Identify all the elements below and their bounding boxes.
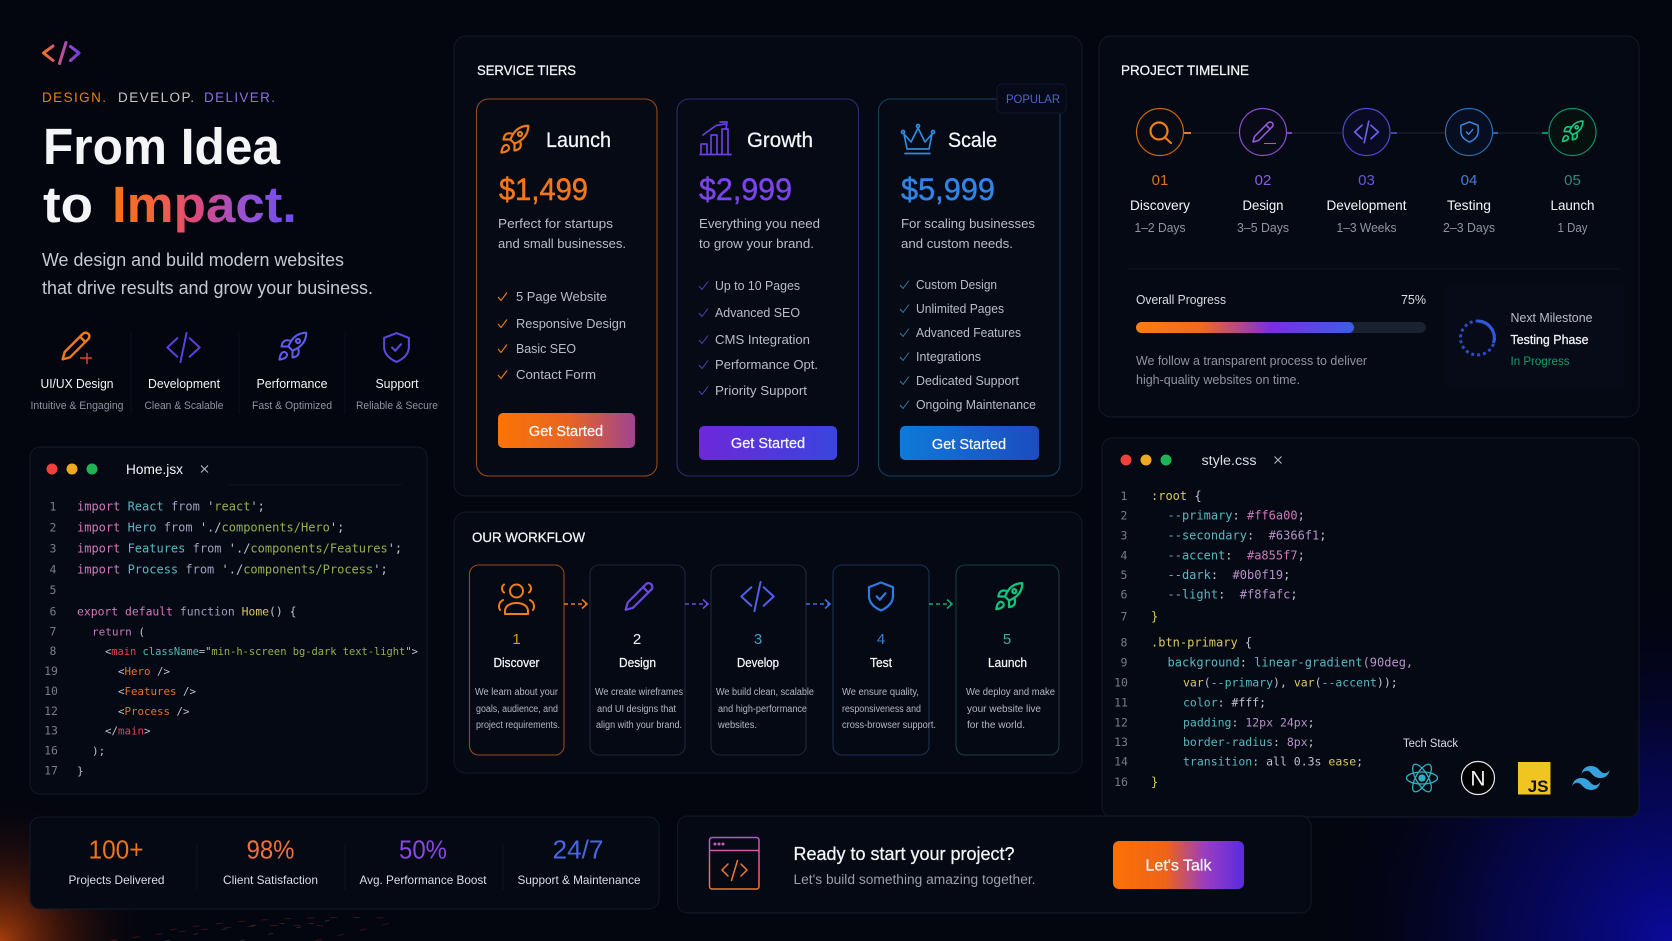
step card: Test: responsiveness and xyxy=(842,704,921,715)
line numbers: 17 xyxy=(44,764,58,778)
line numbers xyxy=(1114,489,1128,789)
step card: Develop xyxy=(711,565,814,755)
step card: Design: 2 xyxy=(633,631,641,648)
title: to xyxy=(43,176,93,233)
step 1: Discovery: Discovery xyxy=(1130,197,1190,213)
line numbers: 10 xyxy=(44,684,58,698)
heading: PROJECT TIMELINE xyxy=(1121,62,1249,78)
code block: ); xyxy=(92,745,105,758)
step card: Discover xyxy=(470,565,564,755)
logo: code brackets xyxy=(44,42,79,64)
step 1: Discovery: 1–2 Days xyxy=(1134,221,1186,235)
code block: import React from 'react'; xyxy=(77,500,265,514)
icon: JavaScript: JS xyxy=(1528,777,1548,796)
overall progress xyxy=(1136,293,1426,387)
description: and small businesses. xyxy=(498,236,626,251)
feature list: Basic SEO xyxy=(516,341,576,356)
code block: --dark: #0b0f19; xyxy=(1168,568,1290,582)
feature: Development xyxy=(144,333,224,412)
line numbers: 16 xyxy=(44,744,58,758)
panel: style.css code editor xyxy=(1102,438,1639,817)
heading: SERVICE TIERS xyxy=(477,62,576,78)
button xyxy=(699,426,837,460)
step 5: Launch: Launch xyxy=(1550,197,1594,213)
title xyxy=(43,118,297,233)
step card: Test: Test xyxy=(870,656,892,670)
line numbers: 10 xyxy=(1114,676,1128,690)
code block xyxy=(1151,489,1413,789)
tier name: Scale xyxy=(948,129,997,152)
line numbers: 8 xyxy=(50,644,57,658)
step 3: Development: 1–3 Weeks xyxy=(1336,221,1396,235)
code block: transition: all 0.3s ease; xyxy=(1183,755,1363,769)
code block: <Hero /> xyxy=(118,665,171,678)
description: and custom needs. xyxy=(901,236,1013,251)
feature list: Responsive Design xyxy=(516,316,626,331)
arrow xyxy=(806,600,830,608)
feature list xyxy=(699,278,818,398)
overall progress: Overall Progress xyxy=(1136,293,1226,307)
line numbers: 7 xyxy=(50,624,57,638)
line numbers: 12 xyxy=(1114,716,1128,730)
icon: rocket xyxy=(501,126,528,153)
step card: Develop: Develop xyxy=(737,656,779,670)
step card: Design: We create wireframes xyxy=(595,687,683,698)
feature list: Custom Design xyxy=(916,278,997,292)
step card: Test: 4 xyxy=(877,631,885,648)
line numbers: 13 xyxy=(44,724,58,738)
icon: JavaScript xyxy=(1518,762,1550,796)
window controls xyxy=(1120,454,1172,466)
stat: projects delivered: 100+ xyxy=(88,834,144,864)
feature list: Performance Opt. xyxy=(715,357,818,372)
line numbers: 6 xyxy=(50,605,57,619)
code block: <main className="min-h-screen bg-dark text-light"> xyxy=(105,646,418,658)
code block: background: linear-gradient(90deg, xyxy=(1168,655,1413,669)
step card: Design xyxy=(590,565,685,755)
step card: Develop: and high-performance xyxy=(718,704,807,715)
heading: Ready to start your project? xyxy=(794,844,1014,864)
step card: Design: align with your brand. xyxy=(596,720,682,731)
feature: Support: Reliable & Secure xyxy=(356,400,438,412)
stat: performance boost: 50% xyxy=(399,834,447,864)
overall progress: high-quality websites on time. xyxy=(1136,373,1300,387)
code block: :root { xyxy=(1151,489,1202,503)
step 4: Testing: 04 xyxy=(1461,172,1477,189)
arrow xyxy=(929,600,952,608)
stat: performance boost: Avg. Performance Boost xyxy=(360,873,487,887)
description: to grow your brand. xyxy=(699,236,814,251)
code block: var(--primary), var(--accent)); xyxy=(1183,676,1398,690)
line numbers: 4 xyxy=(50,562,57,576)
feature list: Contact Form xyxy=(516,367,596,382)
line numbers: 11 xyxy=(1114,696,1128,710)
tier card: Launch xyxy=(476,99,657,476)
arrow xyxy=(685,600,708,608)
button xyxy=(498,413,635,448)
step 4: Testing xyxy=(1443,108,1495,235)
feature: UI/UX Design: UI/UX Design xyxy=(40,376,114,391)
feature list: Advanced SEO xyxy=(715,305,800,320)
next milestone card: Next Milestone xyxy=(1510,311,1593,325)
code block: } xyxy=(1151,610,1158,624)
title: From Idea xyxy=(43,118,281,175)
step card: Discover: Discover xyxy=(494,656,540,670)
code block: --secondary: #6366f1; xyxy=(1168,528,1326,542)
line numbers: 3 xyxy=(50,541,57,555)
feature list: Up to 10 Pages xyxy=(715,278,800,293)
title: Impact. xyxy=(112,176,297,233)
step 3: Development xyxy=(1326,108,1407,235)
line numbers: 16 xyxy=(1114,775,1128,789)
line numbers: 13 xyxy=(1114,735,1128,749)
step card: Develop: We build clean, scalable xyxy=(716,687,814,698)
line numbers: 5 xyxy=(1121,568,1127,582)
line numbers xyxy=(44,500,58,778)
button: Get Started xyxy=(731,436,805,452)
icon: crown xyxy=(902,124,934,154)
overall progress: 75% xyxy=(1401,293,1426,307)
tagline xyxy=(42,90,275,105)
step 2: Design: 02 xyxy=(1255,172,1271,189)
step 2: Design: Design xyxy=(1242,197,1284,213)
line numbers: 5 xyxy=(50,583,56,597)
step card: Design: Design xyxy=(619,656,656,670)
price: $5,999 xyxy=(901,171,995,207)
code block: --light: #f8fafc; xyxy=(1168,588,1298,602)
panel: call to action xyxy=(678,816,1311,913)
feature list: Advanced Features xyxy=(916,326,1021,340)
code block: </main> xyxy=(105,725,151,738)
line numbers: 8 xyxy=(1121,635,1128,649)
line numbers: 19 xyxy=(44,664,58,678)
description: For scaling businesses xyxy=(901,216,1036,231)
tagline: DELIVER. xyxy=(204,90,275,105)
feature list: 5 Page Website xyxy=(516,289,607,304)
feature list: CMS Integration xyxy=(715,332,810,347)
stat: projects delivered: Projects Delivered xyxy=(68,873,164,887)
step card: Test: We ensure quality, xyxy=(842,687,919,698)
step card: Discover: project requirements. xyxy=(476,720,560,731)
step card: Discover: goals, audience, and xyxy=(476,704,558,715)
tier name: Launch xyxy=(546,129,611,152)
step card: Launch: for the world. xyxy=(967,720,1025,731)
tier card: Scale xyxy=(878,99,1060,476)
code block: <Process /> xyxy=(118,705,190,718)
tier card: Growth xyxy=(677,99,858,476)
stat: support: Support & Maintenance xyxy=(518,873,641,887)
step card: Design: and UI designs that xyxy=(597,704,676,715)
price: $1,499 xyxy=(499,171,588,207)
feature list: Ongoing Maintenance xyxy=(916,398,1036,412)
step card: Discover: 1 xyxy=(512,631,521,648)
panel: service tiers xyxy=(454,36,1082,496)
tagline: DESIGN. xyxy=(42,90,106,105)
button: Get Started xyxy=(932,437,1006,453)
stat: client satisfaction: Client Satisfaction xyxy=(223,873,318,887)
button: Let's Talk xyxy=(1146,858,1213,874)
line numbers: 3 xyxy=(1121,528,1128,542)
stat: performance boost xyxy=(360,834,487,887)
code block: border-radius: 8px; xyxy=(1183,735,1315,749)
step card: Test: cross-browser support. xyxy=(842,720,936,731)
feature list: Integrations xyxy=(916,350,981,364)
button xyxy=(900,426,1039,460)
step card: Discover: We learn about your xyxy=(475,687,559,698)
file tab xyxy=(1202,453,1282,468)
stat: support xyxy=(518,834,641,887)
intro paragraph xyxy=(42,250,373,298)
intro paragraph: We design and build modern websites xyxy=(42,250,344,270)
panel: our workflow xyxy=(454,512,1082,773)
line numbers: 2 xyxy=(1121,509,1127,523)
panel: Home.jsx code editor xyxy=(30,447,427,794)
description xyxy=(901,216,1036,251)
hero section xyxy=(30,42,438,414)
line numbers: 4 xyxy=(1121,548,1128,562)
button: Get Started xyxy=(529,424,603,440)
step card: Develop: websites. xyxy=(717,720,757,731)
icon: Next.js: N xyxy=(1470,768,1486,790)
description: Perfect for startups xyxy=(498,216,614,231)
code block: .btn-primary { xyxy=(1151,635,1252,649)
line numbers: 14 xyxy=(1114,755,1128,769)
step 1: Discovery: 01 xyxy=(1152,172,1168,189)
icon: React xyxy=(1406,762,1438,794)
next milestone card xyxy=(1444,285,1624,388)
icon: users xyxy=(499,584,534,614)
step 5: Launch xyxy=(1549,108,1596,235)
feature list: Priority Support xyxy=(715,383,807,398)
price: $2,999 xyxy=(699,171,792,207)
code block: import Process from './components/Process'; xyxy=(77,562,388,576)
feature: Performance xyxy=(252,333,332,412)
line numbers: 2 xyxy=(50,520,56,534)
description xyxy=(699,216,820,251)
code block: --accent: #a855f7; xyxy=(1168,548,1305,562)
step 5: Launch: 1 Day xyxy=(1558,221,1588,235)
feature: Development: Clean & Scalable xyxy=(144,400,224,412)
step card: Launch: your website live xyxy=(967,704,1041,715)
step 1: Discovery xyxy=(1130,108,1190,235)
code block: import Features from './components/Features'; xyxy=(77,541,402,555)
step 4: Testing: 2–3 Days xyxy=(1443,221,1495,235)
line numbers: 1 xyxy=(1121,489,1128,503)
feature list: Unlimited Pages xyxy=(916,302,1004,316)
icon: Next.js xyxy=(1462,762,1494,794)
feature: Performance: Performance xyxy=(256,376,328,391)
file tab: Home.jsx xyxy=(126,462,183,477)
step card: Launch: Launch xyxy=(988,656,1027,670)
step 3: Development: Development xyxy=(1326,197,1407,213)
progress bar xyxy=(1136,322,1426,333)
step card: Launch: 5 xyxy=(1003,631,1011,648)
file tab: style.css xyxy=(1202,453,1257,468)
feature list: Dedicated Support xyxy=(916,374,1020,388)
code block: padding: 12px 24px; xyxy=(1183,716,1315,730)
icon: Tailwind xyxy=(1572,766,1610,790)
line numbers: 7 xyxy=(1121,610,1128,624)
code block: return ( xyxy=(92,625,145,638)
tech stack: Tech Stack xyxy=(1403,738,1458,750)
popular badge: POPULAR xyxy=(1006,92,1060,106)
code block: --primary: #ff6a00; xyxy=(1168,509,1305,523)
icon: code window xyxy=(710,838,759,889)
code block: <Features /> xyxy=(118,685,197,698)
feature: Support: Support xyxy=(376,376,419,391)
step 2: Design xyxy=(1237,108,1289,235)
tech stack xyxy=(1403,738,1610,796)
window controls xyxy=(46,464,98,474)
step 5: Launch: 05 xyxy=(1564,172,1581,189)
panel: project timeline xyxy=(1099,36,1639,417)
code block: } xyxy=(77,765,84,778)
panel: stats xyxy=(30,817,659,909)
feature: UI/UX Design: Intuitive & Engaging xyxy=(30,400,124,412)
line numbers: 12 xyxy=(44,704,58,718)
code block: import Hero from './components/Hero'; xyxy=(77,520,344,534)
stat: client satisfaction: 98% xyxy=(246,834,294,864)
stat: projects delivered xyxy=(68,834,164,887)
step 4: Testing: Testing xyxy=(1447,197,1491,213)
overall progress: We follow a transparent process to deliver xyxy=(1136,354,1367,368)
button xyxy=(1113,841,1244,889)
description xyxy=(498,216,626,251)
code block: color: #fff; xyxy=(1183,696,1266,710)
feature: UI/UX Design xyxy=(30,333,124,412)
stat: support: 24/7 xyxy=(552,834,604,864)
step card: Launch xyxy=(956,565,1059,755)
code block xyxy=(77,500,418,778)
step 3: Development: 03 xyxy=(1358,172,1375,189)
progress ring xyxy=(1460,321,1494,355)
popular badge xyxy=(997,84,1066,113)
arrow xyxy=(564,600,587,608)
stat: client satisfaction xyxy=(223,834,318,887)
step card: Launch: We deploy and make xyxy=(966,687,1055,698)
intro paragraph: that drive results and grow your business. xyxy=(42,278,373,298)
line numbers: 9 xyxy=(1121,655,1128,669)
step 2: Design: 3–5 Days xyxy=(1237,221,1289,235)
icon: chart xyxy=(700,122,731,154)
heading: OUR WORKFLOW xyxy=(472,529,586,545)
code block: } xyxy=(1151,775,1158,789)
feature: Support xyxy=(356,333,438,412)
step card: Test xyxy=(833,565,936,755)
feature: Development: Development xyxy=(148,376,220,391)
step card: Develop: 3 xyxy=(754,631,762,648)
file tab xyxy=(126,462,208,477)
description: Everything you need xyxy=(699,216,820,231)
feature: Performance: Fast & Optimized xyxy=(252,400,332,412)
feature list xyxy=(498,289,626,382)
line numbers: 6 xyxy=(1121,588,1128,602)
next milestone card: Testing Phase xyxy=(1510,333,1589,347)
subtext: Let's build something amazing together. xyxy=(794,872,1036,887)
code block: export default function Home() { xyxy=(77,605,296,619)
tagline: DEVELOP. xyxy=(118,90,194,105)
next milestone card: In Progress xyxy=(1510,356,1570,368)
feature list xyxy=(900,278,1036,412)
line numbers: 1 xyxy=(50,500,57,514)
tier name: Growth xyxy=(747,129,813,152)
